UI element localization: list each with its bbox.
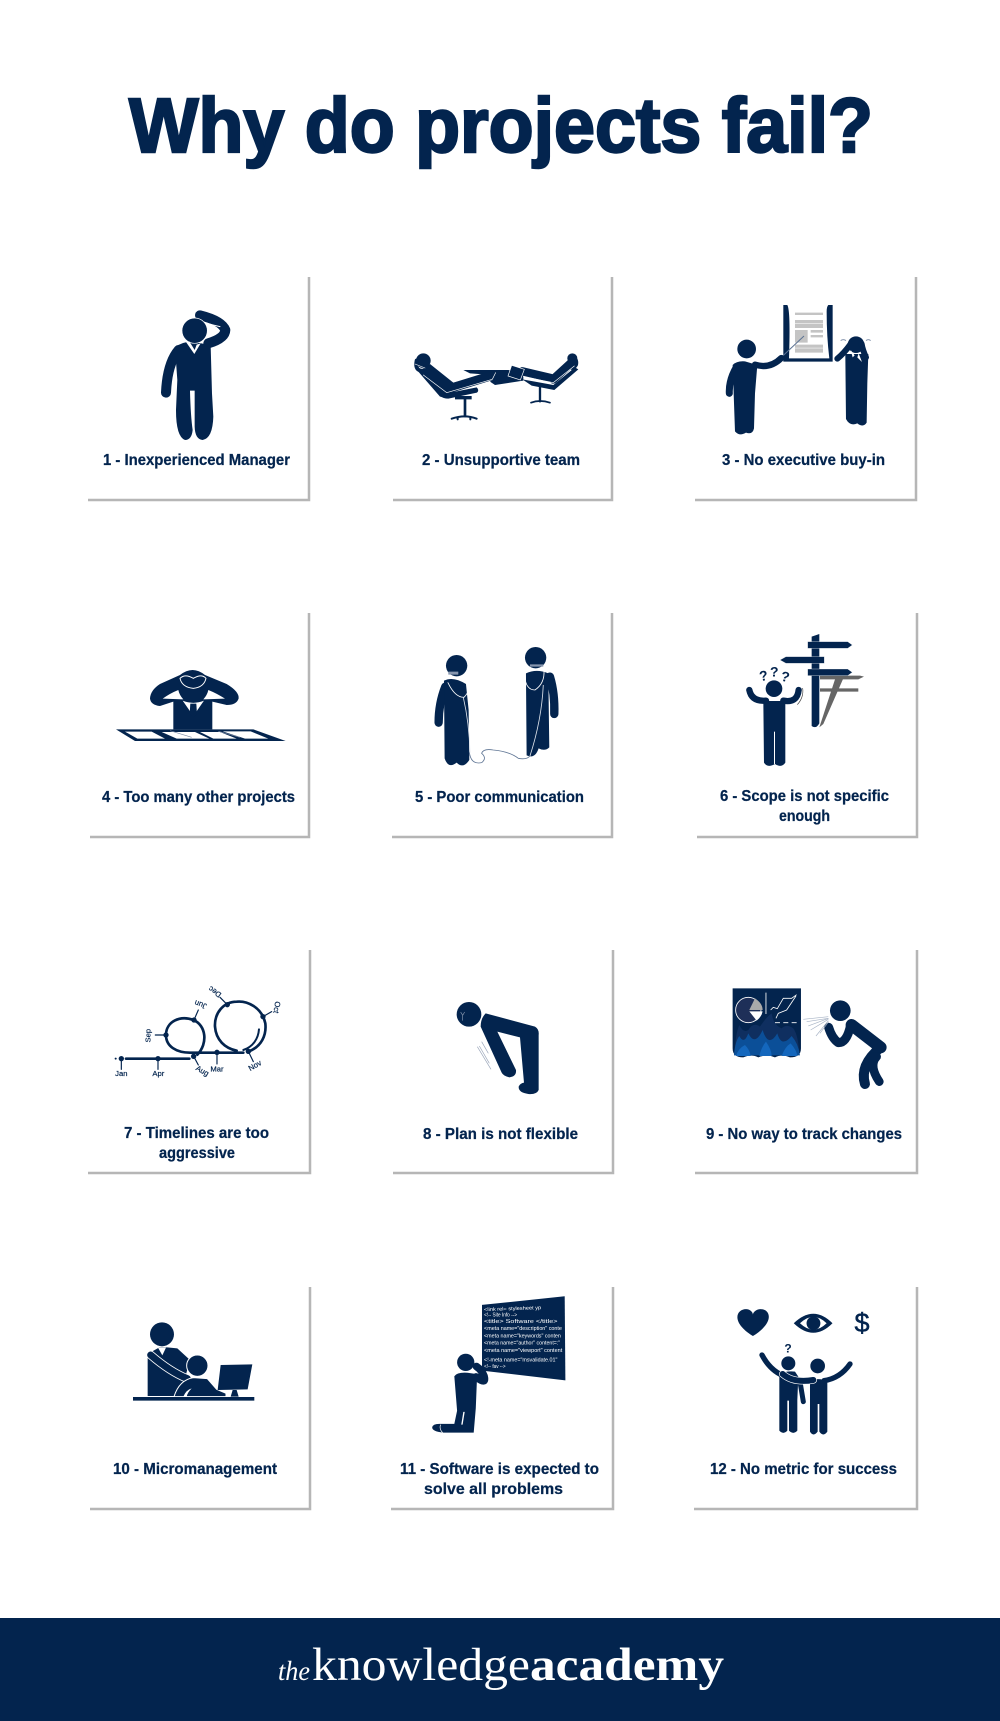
icon: two people reclining with feet on a table	[415, 353, 578, 419]
icon: heart	[737, 1309, 769, 1336]
label: 7 - Timelines are too	[124, 1125, 269, 1142]
title: Why do projects fail?	[129, 83, 873, 169]
panel: 9 No way to track changes	[695, 950, 917, 1173]
label: 8 - Plan is not flexible	[423, 1126, 578, 1143]
icon: two people, one with a question mark	[762, 1342, 850, 1434]
label line 2: enough	[779, 808, 830, 825]
month labels: Jan	[115, 1069, 128, 1078]
month labels: Apr	[152, 1069, 165, 1078]
label: 3 - No executive buy-in	[722, 452, 885, 469]
question marks: ?	[779, 668, 791, 685]
panel: 12 No metric for success	[694, 1287, 917, 1509]
panel: 1 Inexperienced Manager	[88, 277, 309, 500]
label: 1 - Inexperienced Manager	[103, 452, 290, 469]
month labels: Aug	[194, 1064, 211, 1078]
burning chart board	[733, 988, 801, 1057]
icon: person bending forward	[457, 1002, 539, 1094]
icon: two people on a poor phone line	[439, 647, 554, 765]
kneeling figure	[432, 1354, 485, 1433]
icon: presenter and executive covering eyes	[729, 305, 871, 434]
code screen: <meta name="keywords" conten	[484, 1333, 561, 1339]
label line 2: solve all problems	[424, 1481, 563, 1498]
logo: the: the	[278, 1656, 310, 1686]
code screen: <meta name="viewport" content	[484, 1348, 563, 1354]
panel: 5 Poor communication	[392, 613, 612, 837]
icon: kneeling person facing code screen	[432, 1296, 565, 1433]
icon: two people, one with a question mark: ?	[784, 1342, 792, 1356]
icon: person blowing on a burning chart	[733, 988, 881, 1084]
month labels: Nov	[247, 1058, 263, 1073]
icon: manager hovering over worker at computer	[133, 1322, 254, 1401]
label: 6 - Scope is not specific	[720, 788, 889, 805]
code screen: <link rel= stylesheet yp	[484, 1305, 541, 1313]
panel: 10 Micromanagement	[90, 1287, 310, 1509]
icon: confused person at signpost	[749, 634, 864, 766]
code screen: <!-- Site Info -->	[484, 1313, 517, 1319]
logo: academy: academy	[530, 1639, 725, 1691]
month labels: Oct	[271, 1001, 282, 1015]
label line 2: aggressive	[159, 1145, 235, 1162]
footer band	[0, 1618, 1000, 1721]
icon: confused manager	[166, 315, 225, 440]
label: 12 - No metric for success	[710, 1461, 897, 1478]
icon: looping timeline	[115, 984, 282, 1078]
logo: knowledge: knowledge	[312, 1639, 530, 1691]
label: 5 - Poor communication	[415, 789, 584, 806]
code screen: <title> Software </title>	[484, 1319, 558, 1325]
code screen: <meta name="author" content=:"	[484, 1341, 560, 1347]
code screen: <!-- fav -->	[484, 1364, 506, 1370]
panel: 2 Unsupportive team	[393, 277, 612, 500]
month labels: Jun	[193, 998, 208, 1011]
panel: 11 Software is expected to solve all problems	[391, 1287, 613, 1509]
label: 2 - Unsupportive team	[422, 452, 580, 469]
label: 4 - Too many other projects	[102, 789, 295, 806]
month labels: Sep	[144, 1029, 153, 1042]
month labels	[115, 984, 282, 1078]
panel: 6 Scope is not specific enough	[697, 613, 917, 837]
code screen: <!-meta name="msvalidate.01"	[484, 1358, 558, 1364]
document board	[783, 305, 833, 362]
icon: dollar sign: $	[854, 1308, 870, 1338]
panel: 8 Plan is not flexible	[393, 950, 613, 1173]
question marks: ?	[770, 664, 779, 680]
icon: eye	[794, 1314, 832, 1333]
month labels: Dec	[207, 984, 223, 999]
question marks	[758, 664, 791, 685]
code screen	[482, 1296, 565, 1380]
label: 11 - Software is expected to	[400, 1461, 599, 1478]
panel: 4 Too many other projects	[90, 613, 309, 837]
question marks: ?	[758, 667, 769, 684]
label: 9 - No way to track changes	[706, 1126, 902, 1143]
panel: 7 Timelines are too aggressive	[88, 950, 310, 1173]
label: 10 - Micromanagement	[113, 1461, 278, 1478]
code screen: <meta name="description" conte	[484, 1326, 562, 1332]
panel: 3 No executive buy-in	[695, 277, 916, 500]
month labels: Mar	[210, 1065, 224, 1074]
icon: person overwhelmed at desk	[116, 670, 286, 741]
